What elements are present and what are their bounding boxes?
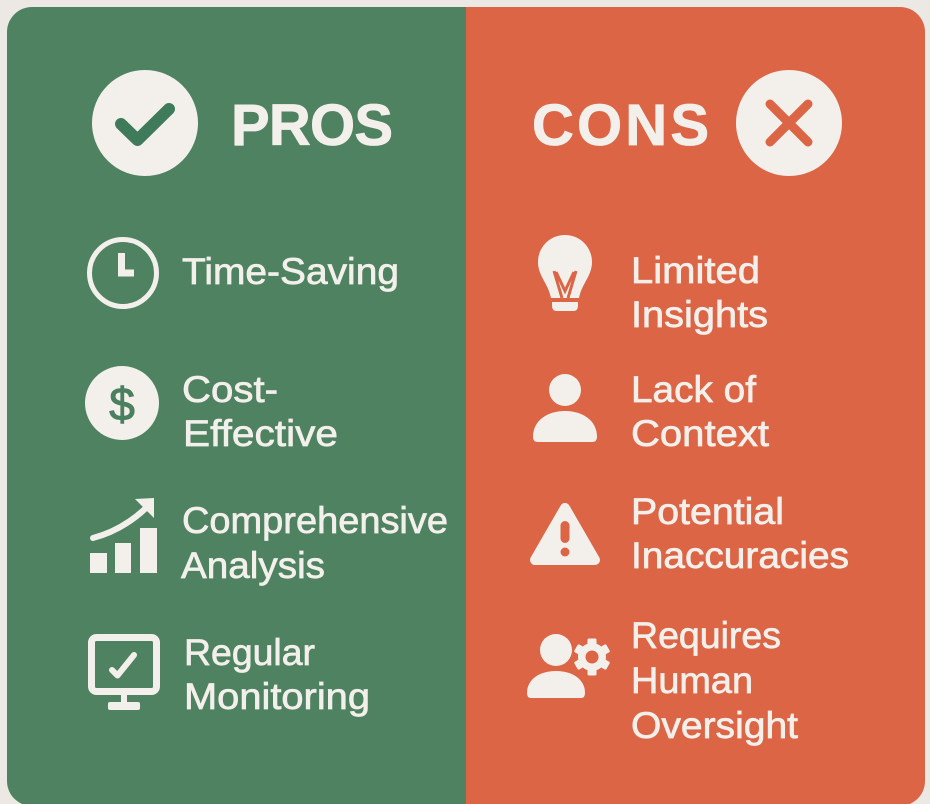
label: comprehensive analysis [181, 500, 448, 586]
label: requires human oversight: Oversight [631, 705, 799, 746]
label: regular monitoring [184, 632, 370, 717]
panel: cons [466, 7, 925, 804]
label: limited insights [631, 250, 768, 335]
icon: clock [90, 240, 156, 306]
heading: cons: CONS [532, 93, 709, 158]
label: requires human oversight [631, 615, 799, 746]
label: limited insights: Insights [631, 294, 768, 335]
icon: light bulb [538, 235, 592, 311]
icon: warning triangle [535, 508, 595, 560]
label: limited insights: Limited [631, 250, 760, 291]
icon: dollar coin [85, 366, 159, 440]
label: potential inaccuracies: Potential [631, 491, 784, 532]
label: cost-effective: Effective [183, 413, 338, 454]
label: potential inaccuracies: Inaccuracies [631, 535, 849, 576]
heading: pros: PROS [231, 93, 393, 158]
label: requires human oversight: Requires [631, 615, 781, 656]
label: lack of context: Lack of [631, 369, 757, 410]
icon: person [533, 374, 597, 442]
icon: check circle [92, 70, 198, 176]
icon: person with gear [527, 634, 610, 698]
icon: x circle [736, 70, 842, 176]
label: cost-effective [182, 369, 338, 454]
label: comprehensive analysis: Comprehensive [182, 500, 448, 541]
icon: growth chart [90, 498, 157, 573]
label: requires human oversight: Human [631, 660, 753, 701]
label: regular monitoring: Monitoring [184, 676, 370, 717]
label: lack of context [631, 369, 770, 454]
label: regular monitoring: Regular [184, 632, 315, 673]
icon: dollar coin: $ [109, 378, 135, 430]
label: comprehensive analysis: Analysis [181, 545, 325, 586]
label: cost-effective: Cost- [182, 369, 278, 410]
label: potential inaccuracies [631, 491, 849, 576]
label: time-saving: Time-Saving [182, 251, 399, 292]
icon: monitor with check [92, 638, 156, 710]
panel: pros [7, 7, 466, 804]
label: lack of context: Context [631, 413, 770, 454]
